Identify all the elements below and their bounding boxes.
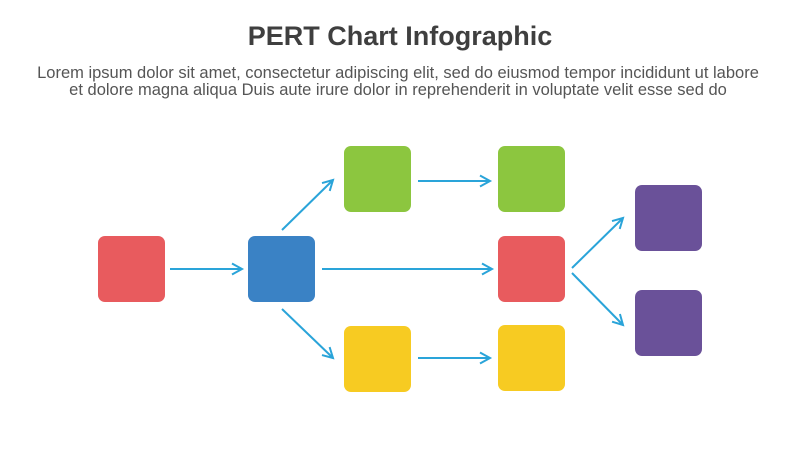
node: red start bbox=[98, 236, 165, 302]
node: blue bbox=[248, 236, 315, 302]
subtitle text: Lorem ipsum dolor sit amet, consectetur adipiscing elit, sed do eiusmod tempor incididunt ut labore bbox=[37, 64, 759, 82]
subtitle text: et dolore magna aliqua Duis aute irure dolor in reprehenderit in voluptate velit esse sed do bbox=[69, 81, 727, 99]
nodes: purple bbox=[635, 185, 702, 356]
nodes: green bbox=[344, 146, 565, 212]
arrows bbox=[170, 180, 623, 358]
node: red middle bbox=[498, 236, 565, 302]
title: PERT Chart Infographic bbox=[248, 21, 552, 51]
subtitle text bbox=[37, 64, 759, 99]
nodes: yellow bbox=[344, 325, 565, 392]
